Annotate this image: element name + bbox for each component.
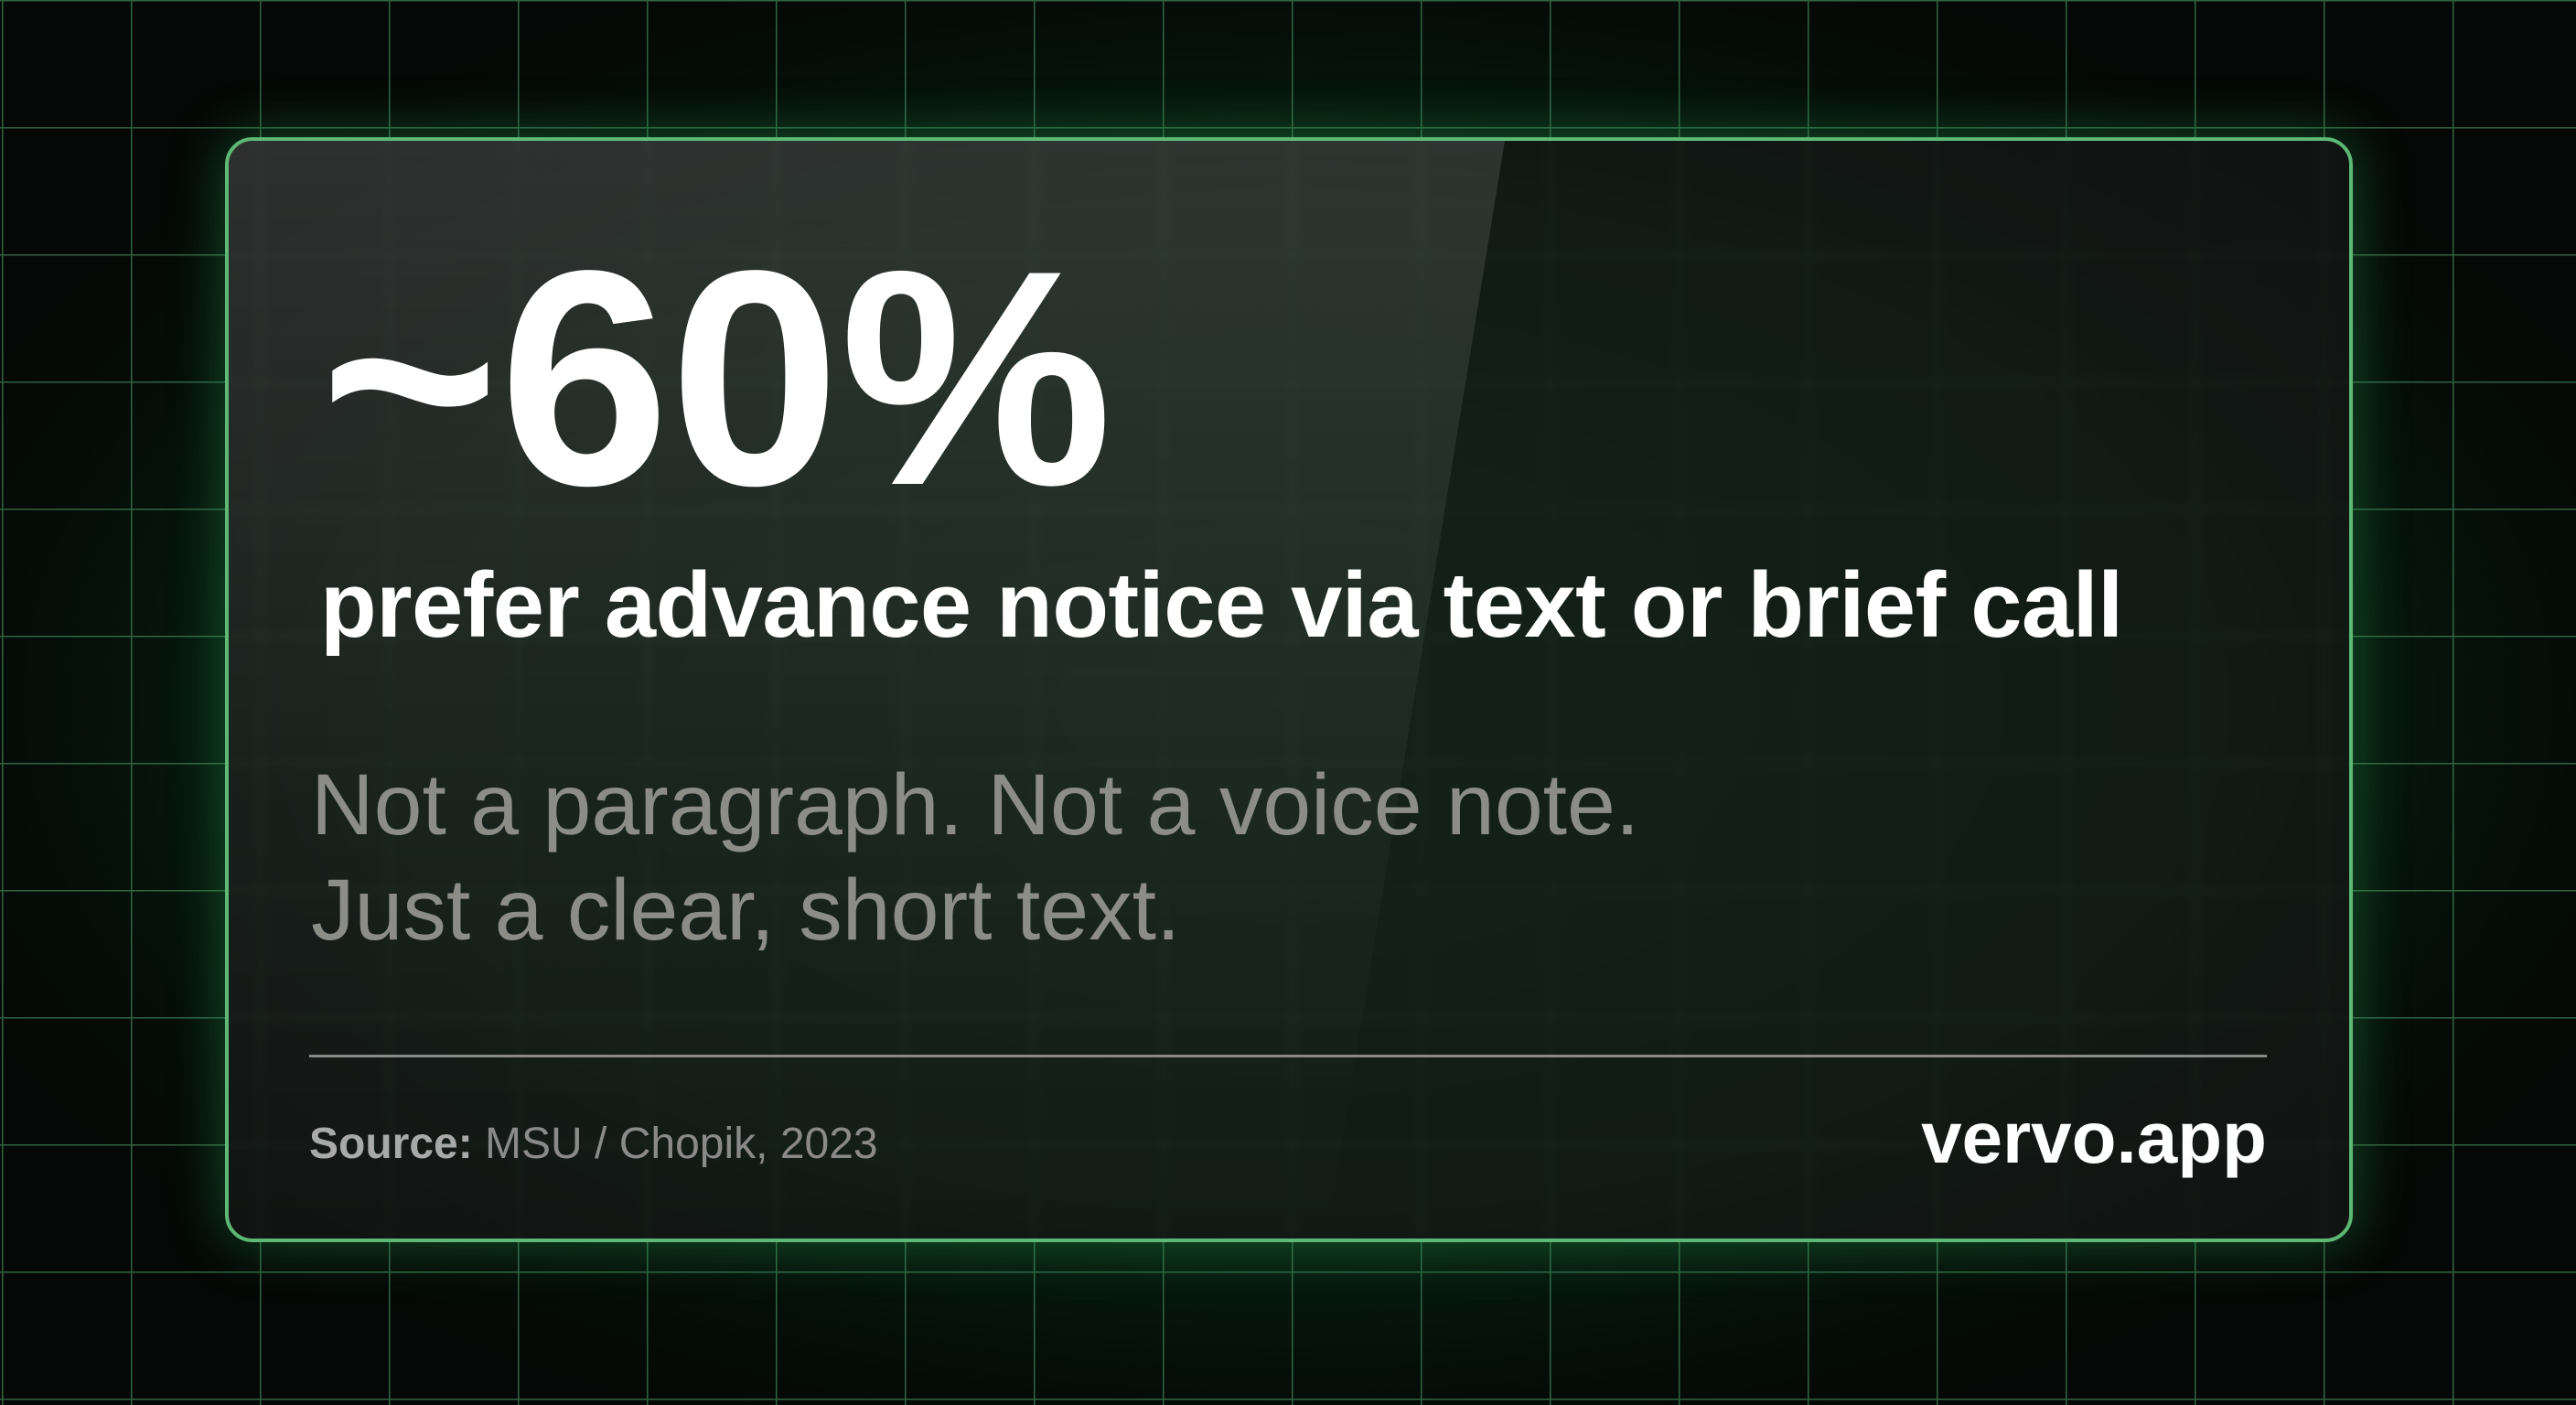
supporting text: Not a paragraph. Not a voice note. bbox=[311, 756, 1639, 853]
divider bbox=[309, 1055, 2267, 1057]
stat number: ~60% bbox=[320, 207, 1112, 549]
source: Source: MSU / Chopik, 2023 bbox=[309, 1120, 878, 1168]
stat description: prefer advance notice via text or brief call bbox=[320, 554, 2123, 657]
supporting text: Just a clear, short text. bbox=[311, 862, 1180, 959]
brand: vervo.app bbox=[1921, 1097, 2267, 1178]
card bbox=[225, 137, 2353, 1242]
supporting text bbox=[311, 756, 1639, 959]
